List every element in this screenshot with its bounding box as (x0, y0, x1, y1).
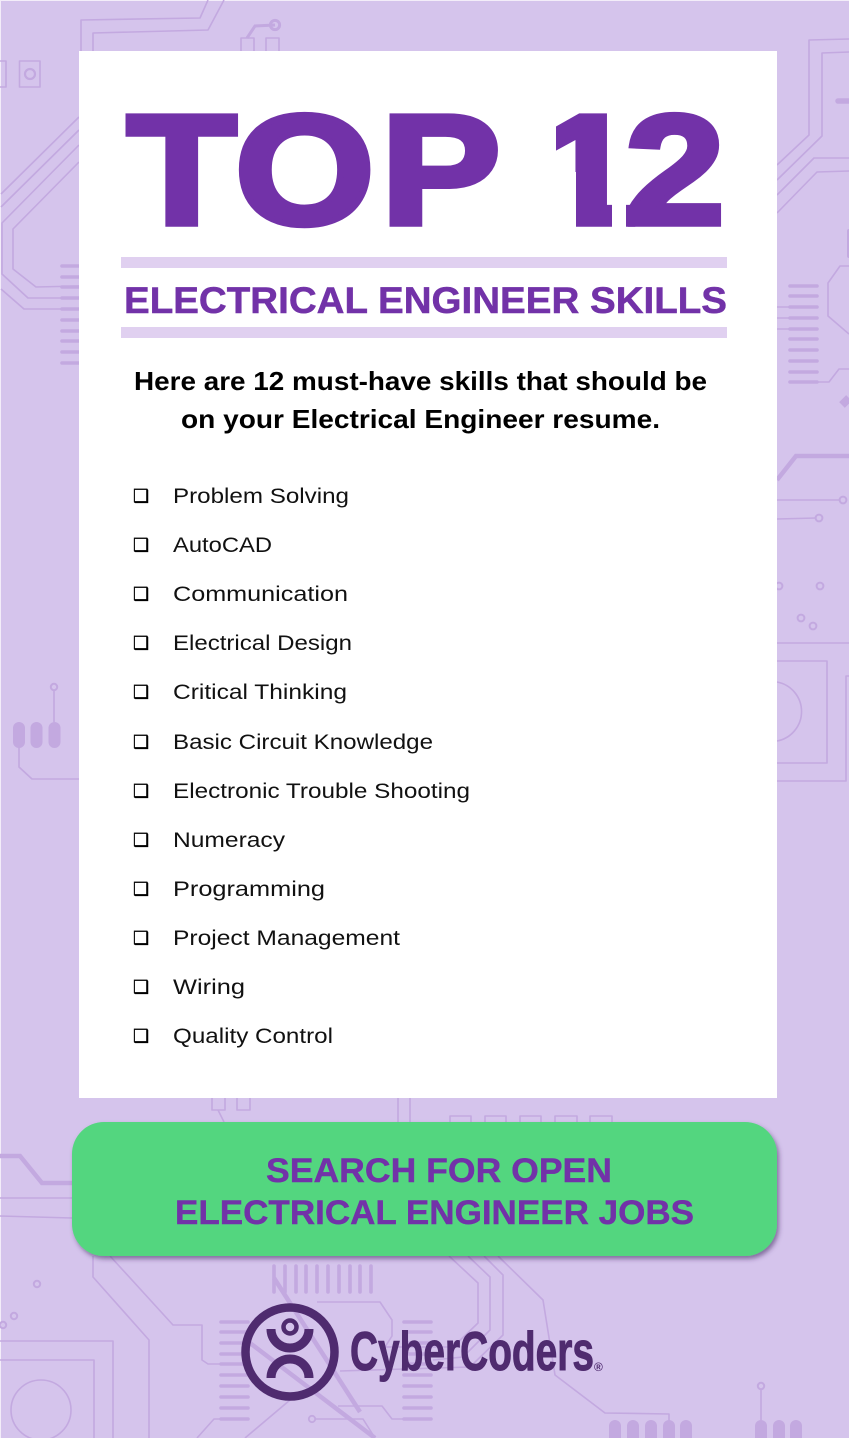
item 10: Project Management (173, 926, 400, 950)
registered mark: ® (594, 1360, 603, 1374)
item 3 (133, 582, 348, 606)
intro text: Here are 12 must-have skills that should be (134, 366, 707, 396)
item 10: ❑ (133, 928, 149, 949)
item 12: Quality Control (173, 1024, 333, 1048)
item 1: Problem Solving (173, 484, 349, 508)
item 9 (133, 877, 325, 901)
wordmark: CyberCoders (350, 1320, 594, 1382)
CyberCoders logo (246, 1308, 603, 1396)
item 3: Communication (173, 582, 348, 606)
item 6: ❑ (133, 732, 149, 753)
intro text (134, 366, 707, 434)
item 3: ❑ (133, 584, 149, 605)
item 2 (133, 533, 272, 557)
title: TOP 12: TOP (127, 83, 501, 257)
item 9: ❑ (133, 879, 149, 900)
title: TOP 12: 12 (537, 83, 725, 257)
item 11: Wiring (173, 975, 245, 999)
title: TOP 12 (126, 112, 722, 228)
item 6: Basic Circuit Knowledge (173, 730, 433, 754)
item 8 (133, 828, 285, 852)
item 11 (133, 975, 245, 999)
item 8: ❑ (133, 830, 149, 851)
item 4: Electrical Design (173, 631, 352, 655)
skills checklist (133, 484, 470, 1048)
item 7: ❑ (133, 781, 149, 802)
bottom rule (121, 327, 727, 338)
item 12: ❑ (133, 1026, 149, 1047)
intro text: on your Electrical Engineer resume. (181, 404, 660, 434)
item 2: ❑ (133, 535, 149, 556)
item 1: ❑ (133, 486, 149, 507)
item 4: ❑ (133, 633, 149, 654)
panel: skills card (79, 51, 777, 1098)
call to action button: ELECTRICAL ENGINEER JOBS (175, 1194, 694, 1232)
icon: person in circle (246, 1308, 334, 1396)
item 7: Electronic Trouble Shooting (173, 779, 470, 803)
call to action button (72, 1122, 777, 1256)
subtitle: ELECTRICAL ENGINEER SKILLS (124, 280, 727, 321)
item 8: Numeracy (173, 828, 285, 852)
item 11: ❑ (133, 977, 149, 998)
call to action button: SEARCH FOR OPEN (266, 1152, 612, 1190)
top rule (121, 257, 727, 268)
item 9: Programming (173, 877, 325, 901)
item 2: AutoCAD (173, 533, 272, 557)
item 5: Critical Thinking (173, 680, 347, 704)
item 5: ❑ (133, 682, 149, 703)
